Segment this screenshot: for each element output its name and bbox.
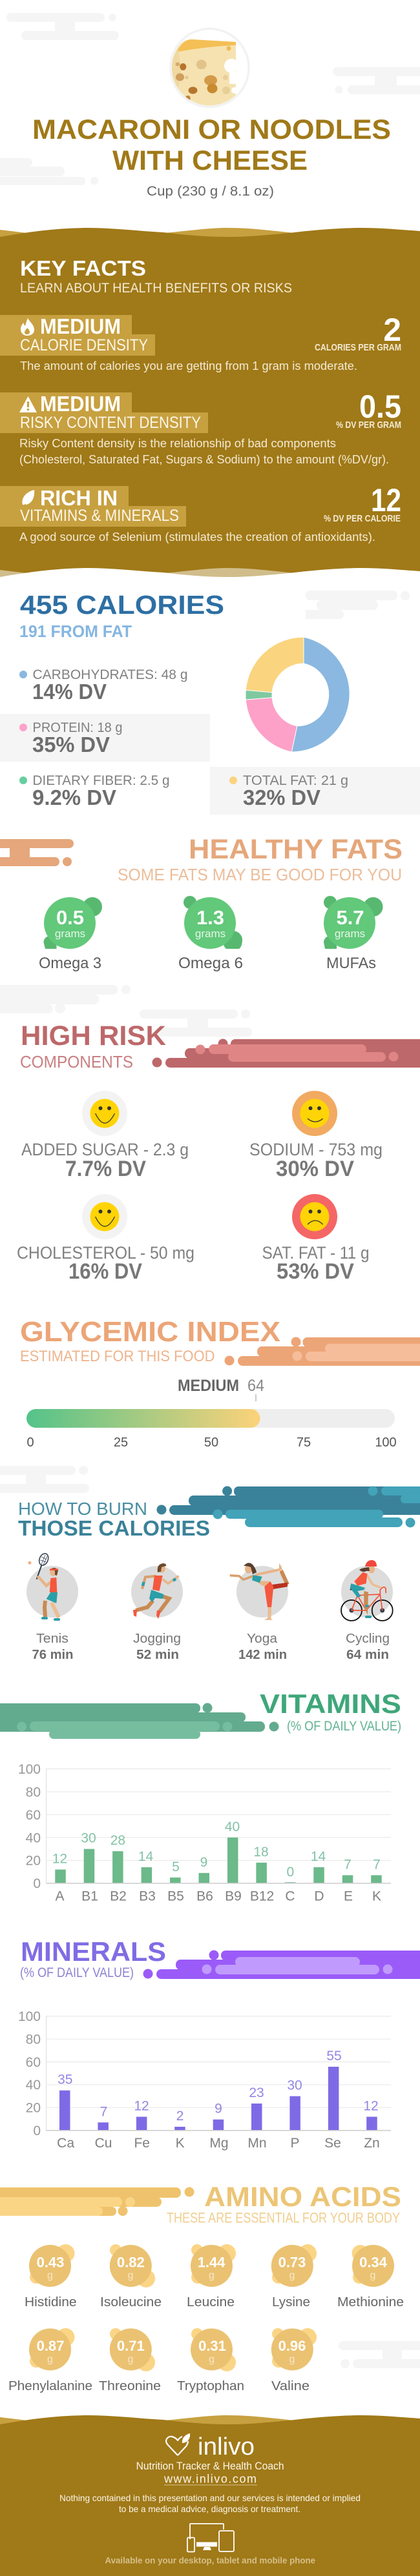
fact: risky content density: RISKY CONTENT DENSITY [20,414,201,432]
heading: how to burn: HOW TO BURN [18,1499,147,1519]
legend: dietary fiber [19,773,169,809]
panel: glycemic index [20,1316,420,1450]
icon: flame [21,318,34,336]
icon: devices [187,2524,234,2552]
gauge label [178,1377,264,1401]
heading: key facts: KEY FACTS [20,256,146,280]
amino: histidine: g [47,2270,53,2281]
activity: cycling: 64 min [346,1648,389,1662]
fat: omega 6 [178,896,243,972]
panel: high risk [17,1020,420,1284]
fact: rich in vitamins and minerals: VITAMINS & MINERALS [20,507,179,525]
bar chart: minerals: 2 [176,2109,184,2124]
gauge label: MEDIUM [178,1377,239,1395]
bar chart: vitamins: 7 [344,1857,352,1872]
bar chart: minerals: 60 [26,2055,41,2070]
bar chart: minerals: 80 [26,2032,41,2047]
amino: methionine: Methionine [337,2295,404,2309]
panel: calories [0,590,420,815]
amino: methionine [337,2245,404,2309]
fact: rich in vitamins and minerals: % DV PER CALORIE [324,513,401,524]
fact: risky content density: (Cholesterol, Saturated Fat, Sugars & Sodium) to the amount (%DV/gr). [19,452,389,466]
bar chart: vitamins: 60 [26,1808,41,1823]
bar chart: vitamins: 80 [26,1785,41,1800]
fact: rich in vitamins and minerals: A good source of Selenium (stimulates the creation of antioxidants). [19,530,375,543]
panel: vitamins [0,1689,401,1904]
amino: leucine: Leucine [187,2295,235,2309]
bar chart: minerals: P [290,2136,300,2151]
gauge scale [26,1435,397,1450]
amino: tryptophan [177,2328,244,2393]
bar chart: vitamins: B5 [167,1889,184,1904]
bar chart: minerals: 20 [26,2101,41,2116]
heading: those calories: THOSE CALORIES [18,1516,210,1540]
decoration: glycemic stripes [225,1337,420,1366]
amino: tryptophan: Tryptophan [177,2379,244,2393]
subheading: minerals: (% OF DAILY VALUE) [20,1965,134,1980]
subheading: glycemic index: ESTIMATED FOR THIS FOOD [20,1348,215,1365]
fat: omega 3: grams [55,928,85,940]
panel: amino acids [0,2182,404,2393]
decoration: high risk stripes [152,1039,420,1068]
fact: risky content density: MEDIUM [40,392,121,416]
title: WITH CHEESE [112,145,308,176]
amino: histidine: 0.43 [37,2254,64,2271]
bar chart: vitamins: B2 [110,1889,127,1904]
bar chart: vitamins: 20 [26,1854,41,1869]
amino: leucine [187,2244,236,2309]
panel: footer [0,2415,420,2576]
gauge scale: 75 [297,1435,311,1450]
amino: lysine [271,2244,317,2309]
amino: valine: 0.96 [278,2338,306,2354]
amino: tryptophan: 0.31 [198,2338,226,2354]
amino: lysine: 0.73 [278,2254,306,2271]
component: sodium [249,1091,383,1181]
website: www.inlivo.com [163,2472,257,2485]
amino: isoleucine: g [128,2270,133,2281]
disclaimer: to be a medical advice, diagnosis or treatment. [119,2504,300,2514]
fat: omega 6: grams [195,928,226,940]
tagline: Nutrition Tracker & Health Coach [136,2460,284,2472]
fat: mufas: grams [335,928,365,940]
amino: lysine: g [289,2270,295,2281]
panel: how to burn calories [18,1486,420,1662]
amino: threonine: Threonine [99,2379,161,2393]
activity: jogging [131,1563,183,1662]
amino: histidine: Histidine [25,2295,77,2309]
gauge scale: 0 [26,1435,34,1450]
bar chart: vitamins: K [372,1889,381,1904]
panel: key facts [0,228,420,587]
bar chart: minerals: Mn [247,2136,267,2151]
bar chart: minerals: Cu [95,2136,112,2151]
amino: isoleucine: 0.82 [117,2254,145,2271]
bar chart: minerals: 35 [58,2073,72,2087]
bar chart: minerals: 30 [287,2078,302,2093]
component: cholesterol [17,1194,194,1284]
bar chart: vitamins: 0 [33,1876,41,1891]
subheading: vitamins: (% OF DAILY VALUE) [287,1719,401,1734]
decoration: vitamins stripes [0,1703,279,1739]
legend: carbohydrates [19,667,187,704]
activity: cycling: Cycling [346,1632,390,1646]
amino: phenylalanine: 0.87 [37,2338,64,2354]
amino: methionine: g [370,2270,375,2281]
activity: tennis [26,1552,78,1662]
amino: leucine: 1.44 [198,2254,226,2271]
bar chart: minerals: 100 [18,2009,41,2024]
legend: carbohydrates: CARBOHYDRATES: 48 g [32,667,187,682]
activity: tennis: 76 min [32,1648,74,1662]
bar chart: minerals: 7 [100,2104,107,2119]
legend: total fat: 32% DV [243,786,320,809]
bar chart: vitamins [18,1762,391,1904]
disclaimer: Nothing contained in this presentation and our services is intended or implied [59,2493,361,2503]
amino: threonine: g [128,2354,133,2365]
fact: calorie density: MEDIUM [40,314,121,338]
component: added sugar [21,1091,189,1181]
bar chart: vitamins: 100 [18,1762,41,1777]
bar chart: minerals: 12 [363,2099,379,2113]
icon: leaf [22,490,34,505]
amino: valine [271,2328,317,2393]
amino: threonine [99,2328,161,2393]
bar chart: minerals: Mg [209,2136,229,2151]
bar chart: vitamins: 28 [110,1833,125,1848]
availability note: Available on your desktop, tablet and mobile phone [105,2555,315,2566]
bar chart: minerals [18,2009,391,2151]
bar chart: vitamins: 5 [172,1860,180,1874]
bar chart: vitamins: B3 [139,1889,156,1904]
legend: dietary fiber: 9.2% DV [32,786,116,809]
bar chart: minerals: 23 [249,2085,264,2100]
component: saturated fat: 53% DV [277,1259,354,1284]
bar chart: vitamins: 14 [138,1849,153,1864]
fat: omega 3 [39,897,102,972]
fact: rich in vitamins and minerals: RICH IN [40,486,118,510]
amino: leucine: g [209,2270,215,2281]
amino: phenylalanine: Phenylalanine [8,2379,92,2393]
legend: dietary fiber: DIETARY FIBER: 2.5 g [32,773,169,788]
bar chart: vitamins: 0 [287,1865,294,1880]
title: MACARONI OR NOODLES [32,114,391,145]
fact: calorie density: The amount of calories you are getting from 1 gram is moderate. [20,359,357,372]
fat: omega 3: 0.5 [56,906,84,929]
heading: glycemic index: GLYCEMIC INDEX [20,1316,280,1348]
component: cholesterol: CHOLESTEROL - 50 mg [17,1243,194,1263]
food image: cheese [169,28,255,110]
heading: minerals: MINERALS [21,1936,166,1967]
activity: jogging: Jogging [133,1632,181,1646]
icon: warning triangle [19,396,37,412]
bar chart: minerals: 55 [326,2049,342,2064]
bar chart: vitamins: B12 [250,1889,274,1904]
bar chart: vitamins: 9 [200,1855,207,1870]
bar chart: vitamins: 18 [253,1845,269,1860]
donut chart [246,637,350,752]
amino: isoleucine: Isoleucine [100,2295,162,2309]
title [32,114,391,176]
fact: calorie density: CALORIES PER GRAM [315,342,401,353]
heading: vitamins: VITAMINS [260,1689,401,1719]
legend: total fat [210,767,420,815]
bar chart: vitamins: C [285,1889,295,1904]
amino: phenylalanine: g [47,2354,53,2365]
bar chart: minerals: K [176,2136,185,2151]
decoration: burn stripes [156,1486,420,1527]
activity: yoga: Yoga [247,1632,278,1646]
activity: cycling [341,1560,393,1662]
legend: carbohydrates: 14% DV [32,680,107,704]
fact: risky content density [0,389,401,466]
fat: omega 6: 1.3 [196,906,224,929]
subheading: key facts: LEARN ABOUT HEALTH BENEFITS OR RISKS [20,281,292,296]
bar chart: minerals: Ca [57,2136,74,2151]
bar chart: minerals: Se [324,2136,341,2151]
bar chart: vitamins: 40 [225,1820,240,1834]
disclaimer [59,2493,361,2514]
bar chart: vitamins: 7 [373,1857,381,1872]
fact: risky content density: Risky Content density is the relationship of bad components [19,436,336,450]
heading: healthy fats: HEALTHY FATS [189,834,403,865]
decoration: amino acid stripes [0,2187,194,2216]
bar chart: vitamins: 14 [311,1849,326,1864]
legend: protein: PROTEIN: 18 g [32,720,123,735]
gauge label: 64 [247,1377,264,1395]
activity: jogging: 52 min [136,1648,179,1662]
amino: valine: g [289,2354,295,2365]
amino: lysine: Lysine [272,2295,310,2309]
component: added sugar: ADDED SUGAR - 2.3 g [21,1140,189,1159]
amino: threonine: 0.71 [117,2338,145,2354]
subheading: healthy fats: SOME FATS MAY BE GOOD FOR YOU [118,865,402,884]
gauge scale: 25 [114,1435,128,1450]
activity: yoga: 142 min [238,1648,287,1662]
subheading: components: COMPONENTS [20,1052,133,1071]
component: sodium: 30% DV [276,1157,354,1181]
heading: calories: 455 CALORIES [20,590,224,620]
logo wordmark: inlivo [198,2433,255,2460]
amino: methionine: 0.34 [359,2254,388,2271]
bar chart: vitamins: 12 [52,1851,67,1867]
fact: rich in vitamins and minerals: 12 [371,482,401,518]
logo: inlivo heart [166,2433,190,2455]
fact: risky content density: % DV PER GRAM [336,420,401,431]
serving size: Cup (230 g / 8.1 oz) [147,184,274,199]
bar chart: minerals: 9 [215,2102,222,2116]
decoration: healthy fats stripes [0,839,74,866]
bar chart: vitamins: B9 [225,1889,242,1904]
panel: minerals [18,1936,420,2151]
amino: phenylalanine [8,2328,92,2393]
legend: protein: 35% DV [32,733,110,756]
subheading: calories from fat: 191 FROM FAT [19,622,132,641]
decoration: minerals stripes [143,1951,420,1979]
heading: amino acids: AMINO ACIDS [204,2182,401,2213]
activity: tennis: Tenis [36,1632,68,1646]
component: added sugar: 7.7% DV [65,1157,146,1181]
fact: rich in vitamins and minerals [0,482,401,543]
component: cholesterol: 16% DV [68,1259,142,1284]
amino: valine: Valine [271,2379,310,2393]
bar chart: vitamins: B6 [196,1889,213,1904]
component: saturated fat [262,1194,370,1284]
bar chart: vitamins: D [314,1889,324,1904]
gauge scale: 50 [204,1435,218,1450]
amino: tryptophan: g [209,2354,215,2365]
legend: protein [0,714,210,762]
gauge scale: 100 [375,1435,397,1450]
bar chart: minerals: Fe [134,2136,150,2151]
bar chart: vitamins: A [55,1889,65,1904]
component: sodium: SODIUM - 753 mg [249,1140,383,1159]
bar chart: vitamins: E [344,1889,353,1904]
bar chart: minerals: Zn [364,2136,380,2151]
bar chart: minerals: 0 [33,2124,41,2138]
bar chart: vitamins: 30 [81,1831,96,1846]
gauge bar [26,1409,395,1428]
fact: calorie density: 2 [383,312,401,348]
activity: yoga [230,1563,288,1662]
amino: isoleucine [100,2244,162,2309]
bar chart: vitamins: 40 [26,1831,41,1845]
amino: histidine [25,2244,77,2309]
component: saturated fat: SAT. FAT - 11 g [262,1243,370,1263]
fat: mufas: MUFAs [326,955,376,972]
bar chart: minerals: 40 [26,2078,41,2093]
fact: calorie density: CALORIE DENSITY [20,336,148,354]
fact: calorie density [0,312,401,372]
fat: omega 6: Omega 6 [178,955,243,972]
fat: mufas [324,896,383,972]
fact: risky content density: 0.5 [359,389,401,425]
bar chart: minerals: 12 [134,2099,149,2113]
fat: mufas: 5.7 [336,906,364,929]
legend: total fat: TOTAL FAT: 21 g [243,773,348,788]
fat: omega 3: Omega 3 [39,955,101,972]
bar chart: vitamins: B1 [81,1889,98,1904]
panel: healthy fats [0,834,403,972]
heading: high risk: HIGH RISK [21,1020,166,1051]
